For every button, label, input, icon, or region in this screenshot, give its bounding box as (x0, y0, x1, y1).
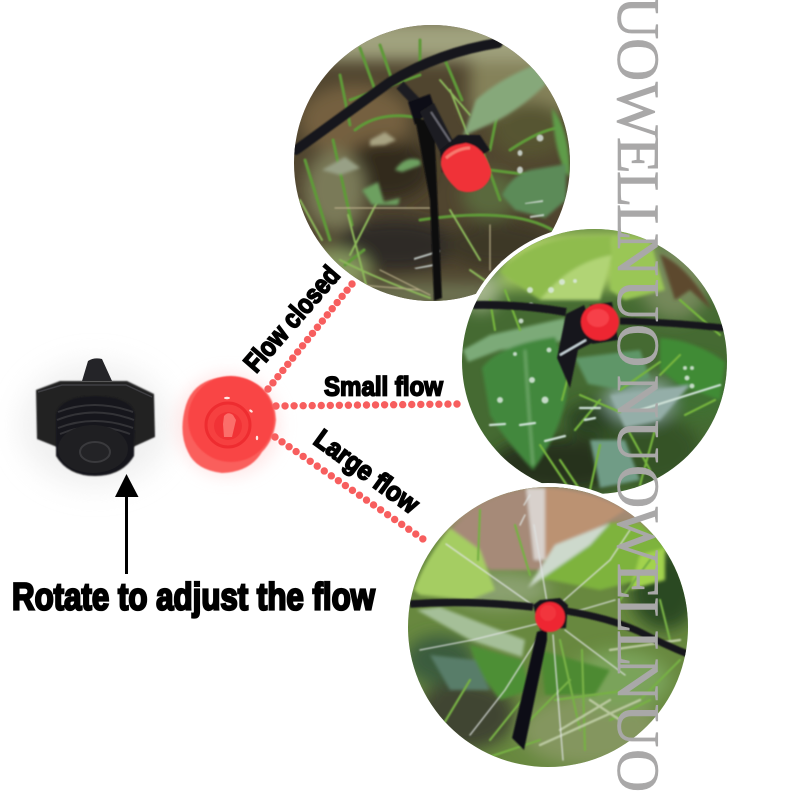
label: small flow: Small flow (324, 372, 444, 402)
photo: dripper with large flow (408, 487, 688, 767)
red cap (535, 602, 565, 632)
arrow: points up to nozzle (115, 474, 138, 574)
icon: black threaded nozzle (20, 358, 170, 487)
photo: dripper with small flow (462, 229, 727, 494)
leaf band and big leaf (463, 318, 570, 362)
water streaks (420, 495, 630, 760)
red cap (581, 304, 619, 340)
icon: red adjustable cap (176, 373, 280, 477)
red cap (441, 143, 491, 192)
pipe (410, 603, 533, 607)
dotted line: to large flow (275, 437, 423, 539)
stake and pipe (473, 305, 566, 312)
dotted line: to flow closed (268, 284, 352, 389)
stake (415, 118, 442, 301)
label: flow closed: Flow closed (238, 260, 346, 378)
pipe (296, 43, 498, 150)
watermark: UOWELLNUONUOWELLNUO (605, 0, 671, 792)
caption: rotate to adjust the flow: Rotate to adjust the flow (12, 576, 375, 618)
dotted line: to small flow (276, 404, 457, 406)
label: large flow: Large flow (308, 424, 426, 520)
leaves (414, 528, 495, 600)
leaves (463, 62, 546, 136)
photo: dripper with flow closed (294, 25, 570, 301)
wall (450, 490, 544, 570)
stake (512, 628, 547, 750)
top leaves (500, 236, 612, 300)
